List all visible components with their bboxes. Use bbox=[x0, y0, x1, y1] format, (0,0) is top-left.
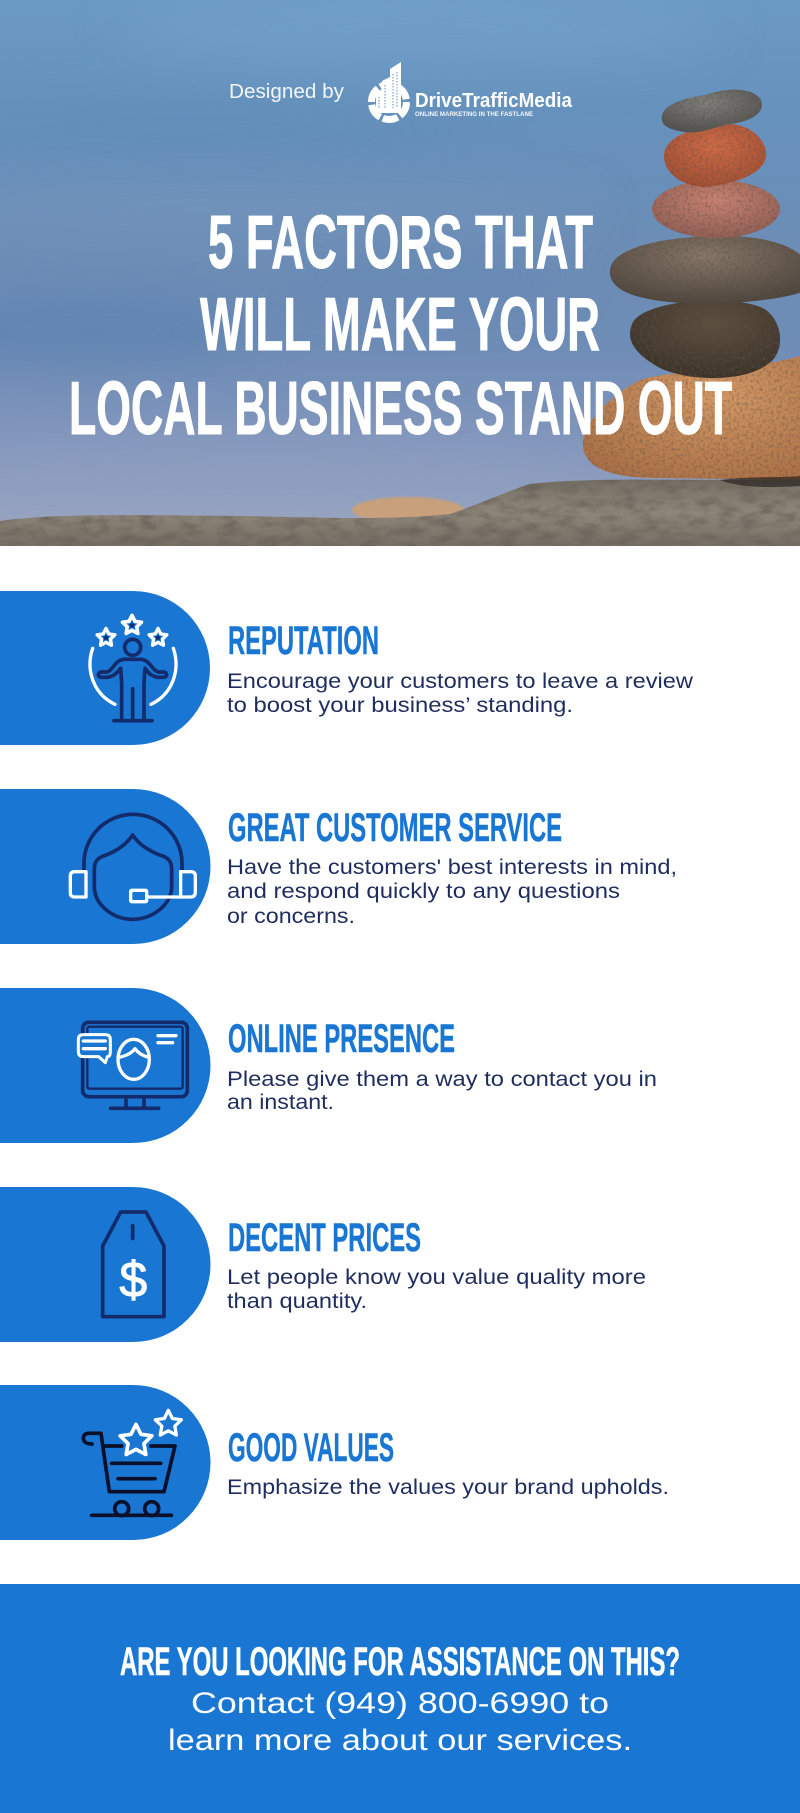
pill background bbox=[0, 1187, 210, 1342]
rock: orange stone bbox=[664, 124, 766, 187]
panel: good values bbox=[0, 1385, 669, 1540]
description bbox=[227, 1067, 657, 1114]
logo tagline: ONLINE MARKETING IN THE FASTLANE bbox=[415, 112, 533, 118]
description bbox=[227, 669, 694, 717]
logo icon bbox=[372, 62, 406, 120]
footer text: learn more about our services. bbox=[168, 1724, 632, 1757]
icon: headset agent bbox=[70, 814, 195, 919]
panel: hero photo background bbox=[0, 0, 800, 546]
icon: cart with stars bbox=[83, 1410, 181, 1516]
icon: price tag bbox=[103, 1212, 164, 1317]
heading: ONLINE PRESENCE bbox=[228, 1017, 455, 1061]
rock: dark stone bbox=[630, 300, 780, 378]
footer text: Contact (949) 800-6990 to bbox=[191, 1687, 609, 1720]
icon: monitor with face and chat bubble bbox=[78, 1022, 187, 1108]
logo: Drive Traffic Media bbox=[372, 62, 573, 120]
panel: great customer service bbox=[0, 789, 677, 944]
footer text bbox=[168, 1687, 632, 1757]
panel: decent prices bbox=[0, 1187, 646, 1342]
panel: reputation bbox=[0, 591, 694, 745]
description: an instant. bbox=[227, 1090, 334, 1114]
pill background bbox=[0, 1385, 210, 1540]
rock base ground bbox=[0, 479, 800, 546]
logo wordmark: DriveTrafficMedia bbox=[415, 89, 573, 112]
heading: GOOD VALUES bbox=[228, 1426, 394, 1470]
description: than quantity. bbox=[227, 1289, 367, 1313]
icon: price tag: $ bbox=[119, 1252, 147, 1308]
description: to boost your business’ standing. bbox=[227, 693, 573, 717]
description: Let people know you value quality more bbox=[227, 1265, 646, 1289]
title bbox=[69, 200, 732, 450]
panel: online presence bbox=[0, 988, 657, 1143]
description: Please give them a way to contact you in bbox=[227, 1067, 657, 1091]
text: designed by: Designed by bbox=[229, 81, 344, 103]
heading: GREAT CUSTOMER SERVICE bbox=[228, 806, 562, 850]
pill background bbox=[0, 789, 210, 944]
pill background bbox=[0, 591, 210, 745]
description: and respond quickly to any questions bbox=[227, 879, 620, 903]
rock: large sand stone bbox=[583, 356, 800, 480]
description bbox=[227, 855, 677, 928]
rock: pink stone bbox=[652, 180, 780, 238]
description: Encourage your customers to leave a review bbox=[227, 669, 694, 693]
heading: DECENT PRICES bbox=[228, 1216, 421, 1260]
panel: footer call to action bbox=[0, 1584, 800, 1813]
description: Emphasize the values your brand upholds. bbox=[227, 1475, 669, 1499]
pill background bbox=[0, 988, 210, 1143]
description: Have the customers' best interests in mind, bbox=[227, 855, 677, 879]
icon: person with stars bbox=[90, 615, 176, 721]
description: or concerns. bbox=[227, 904, 355, 928]
rock: grey top stone bbox=[662, 90, 762, 132]
rock: pebble behind bbox=[351, 496, 465, 518]
description bbox=[227, 1265, 646, 1313]
heading: REPUTATION bbox=[228, 619, 379, 663]
rock: brown stone bbox=[610, 236, 800, 304]
